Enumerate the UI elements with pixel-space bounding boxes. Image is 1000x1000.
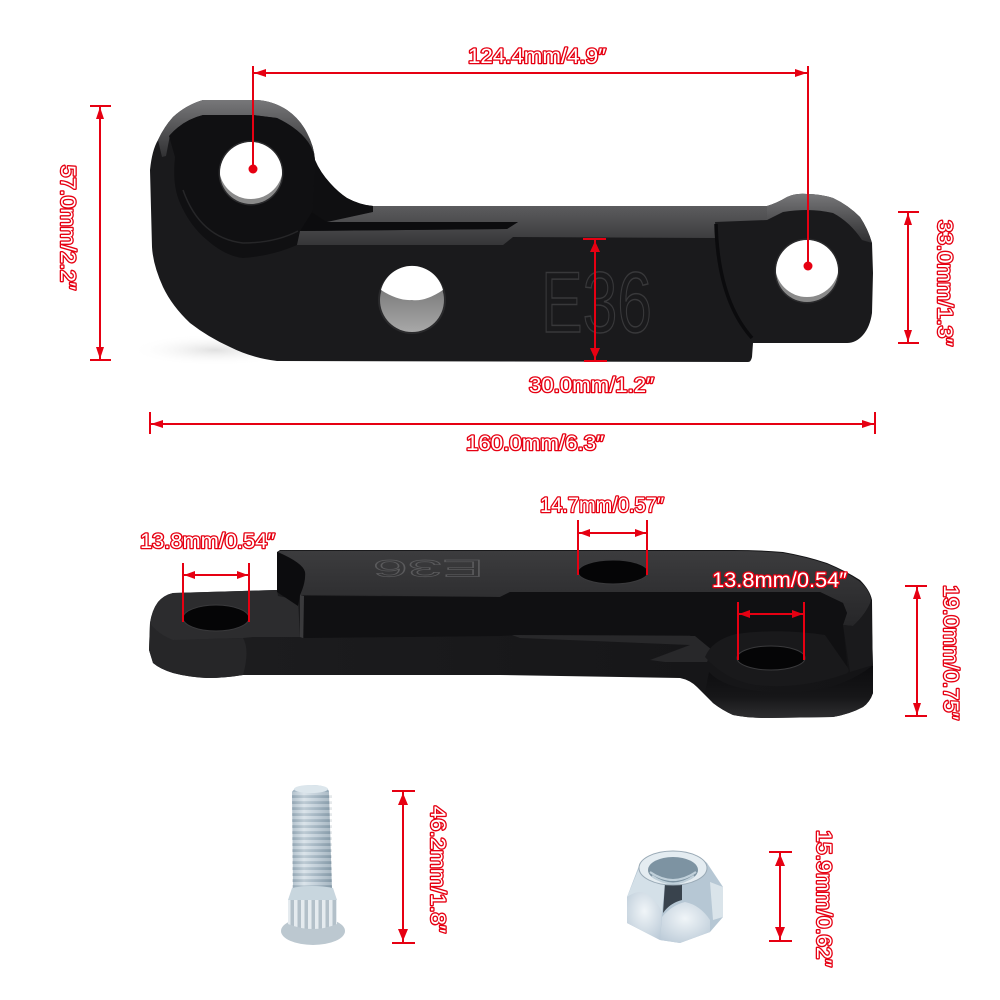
stud threads (292, 785, 332, 890)
dimension: 13.8mm left hole (140, 530, 276, 622)
upper facets (627, 866, 665, 912)
dimension: 15.9mm nut height: 15.9mm/0.62″ (812, 830, 835, 968)
left lobe face (150, 590, 300, 640)
step edge (300, 595, 304, 638)
hole: middle (378, 266, 446, 334)
groove (512, 635, 712, 662)
panel: bracket side view (149, 550, 873, 718)
dimension: 30.0mm thickness (529, 239, 655, 397)
relief surface (297, 206, 767, 245)
stud splines (288, 900, 337, 929)
stud end (294, 785, 328, 793)
hole: right (737, 646, 805, 670)
bracket body (150, 100, 873, 362)
stud head (281, 917, 345, 945)
dimension: 15.9mm nut height (769, 830, 835, 968)
dark facet (663, 883, 682, 913)
dimension: 19.0mm thickness: 19.0mm/0.75″ (939, 585, 962, 721)
dimension: 46.2mm bolt length: 46.2mm/1.8″ (426, 806, 449, 934)
hole: left (183, 605, 249, 631)
E36 engraving: E36 (541, 255, 652, 351)
dimension: 124.4mm width (248, 45, 812, 270)
dimension: 46.2mm bolt length (392, 791, 449, 943)
dimension: 57.0mm height (56, 106, 111, 360)
lobe rim (705, 665, 873, 718)
lobe face ellipse (705, 631, 849, 686)
fillet (312, 160, 373, 222)
dimension: 13.8mm right hole (712, 569, 848, 660)
left facet (627, 892, 662, 940)
dimension: 160.0mm length: 160.0mm/6.3″ (466, 432, 605, 455)
dimension: 30.0mm thickness: 30.0mm/1.2″ (529, 374, 655, 397)
notch wall (277, 552, 305, 606)
relief slot (300, 212, 518, 231)
right facet (710, 882, 723, 920)
upper lobe chamfer (158, 100, 315, 160)
dimension: 124.4mm width: 124.4mm/4.9″ (468, 45, 607, 68)
pocket edge (716, 224, 752, 338)
centre facet (660, 902, 710, 943)
right lobe chamfer (767, 194, 872, 243)
nut bore (648, 857, 698, 883)
dimension: 13.8mm right hole: 13.8mm/0.54″ (712, 569, 848, 592)
dimension: 33.0mm height (898, 212, 956, 347)
bracket side body (149, 550, 873, 718)
panel: bracket top view (130, 100, 873, 366)
pocket around left hole (169, 115, 315, 258)
dimension: 19.0mm thickness (905, 585, 962, 721)
dimension: 33.0mm height: 33.0mm/1.3″ (933, 220, 956, 347)
hole: left (218, 140, 284, 206)
dimension: 160.0mm length (150, 412, 875, 455)
stud collar (288, 886, 337, 900)
upper face (278, 551, 871, 626)
dimension: 57.0mm height: 57.0mm/2.2″ (56, 165, 79, 291)
nut top ring (639, 851, 707, 885)
hole: right (774, 238, 840, 304)
icon: lug nut (627, 851, 723, 943)
pocket step line (183, 190, 298, 243)
hole: middle (578, 560, 648, 584)
icon: wheel stud bolt (281, 785, 345, 945)
dimension: 14.7mm centre hole (540, 494, 665, 575)
shadow under bracket (130, 334, 300, 366)
dimension: 13.8mm left hole: 13.8mm/0.54″ (140, 530, 276, 553)
right cut edge (843, 601, 873, 672)
left lobe rim (149, 623, 246, 678)
nut body (627, 851, 723, 943)
front wall (304, 592, 848, 684)
dimension: 14.7mm centre hole: 14.7mm/0.57″ (540, 494, 665, 517)
E36 engraving: E36 (373, 555, 484, 582)
